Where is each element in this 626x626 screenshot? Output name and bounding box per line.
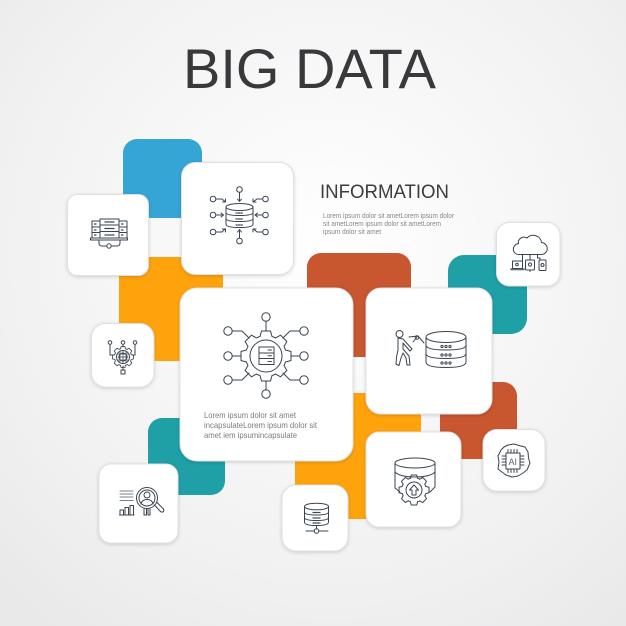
icon: server rack (90, 219, 128, 248)
panel: analytics card (99, 464, 178, 543)
text block: information body (323, 211, 455, 236)
panel: orange square left (119, 257, 223, 361)
icon: database with upload gear (395, 458, 435, 505)
panel: data mining card (366, 288, 492, 414)
text block: information body: ipsum dolor sit amet (323, 227, 381, 236)
panel: teal square right (448, 255, 527, 334)
text block: main body: Lorem ipsum dolor sit amet (204, 410, 297, 420)
panel: blue square (123, 139, 202, 218)
title: BIG DATA (183, 37, 437, 100)
text block: main body: amet iem ipsumincapsulate (204, 430, 297, 440)
text: ai label: AI (508, 457, 517, 467)
text block: information body: sit ametLorem ipsum dolor sit ametLorem (323, 219, 441, 228)
panel: teal square left (148, 418, 225, 495)
icon: cloud with devices (511, 235, 547, 272)
panel: red square top (307, 253, 411, 357)
panel: gear chip card (92, 324, 154, 387)
text block: main body (204, 410, 318, 440)
icon: chart and magnifier with person (120, 488, 164, 515)
panel: server rack card (68, 194, 148, 276)
panel: main card (180, 288, 353, 461)
icon: gear with server and nodes (224, 313, 308, 398)
panel: cloud devices card (496, 222, 560, 286)
icon: database with inbound arrows (210, 187, 268, 244)
text block: information body: Lorem ipsum dolor sit ametLorem ipsum dolor (323, 211, 455, 220)
panel: orange square bottom (295, 393, 421, 519)
panel: database gear card (366, 432, 461, 527)
panel: data streams card (182, 162, 294, 274)
heading: information: INFORMATION (320, 181, 449, 203)
panel: ai card (483, 430, 545, 491)
icon: database with network line (304, 503, 328, 533)
icon: miner with database (396, 330, 466, 368)
panel: red square bottom (440, 382, 517, 459)
icon: ai chip brain (498, 444, 530, 477)
text block: main body: incapsulateLorem ipsum dolor sit (204, 420, 318, 430)
panel: database network card (282, 485, 348, 551)
icon: gear neural network (108, 341, 137, 374)
